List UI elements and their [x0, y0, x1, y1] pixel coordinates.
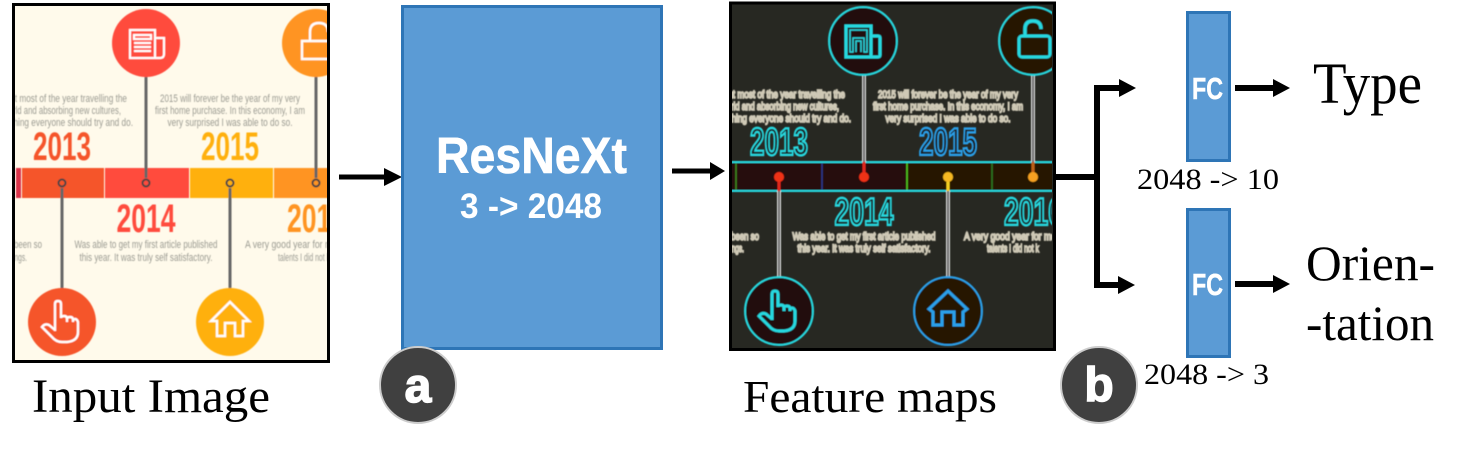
year labels: 2015: [201, 125, 259, 169]
year labels: 2014: [116, 197, 176, 241]
timeline band: [16, 168, 328, 198]
panel: FC block bottom: FC: [1192, 267, 1223, 302]
output label: orientation: Orien-: [1306, 235, 1435, 291]
panel: feature maps: [709, 3, 1067, 350]
output label: type: Type: [1313, 51, 1422, 116]
small description text: spent most of the year travelling the: [0, 93, 127, 105]
feature year labels: 2016: [1004, 191, 1063, 234]
year labels: 2013: [33, 125, 91, 169]
badge: a: a: [405, 360, 432, 413]
small description text: A very good year for me: [245, 239, 337, 251]
label: 2048 to 3: 2048 -> 3: [1144, 358, 1269, 391]
feature description text: [709, 89, 1056, 255]
small description text: talents I did not k: [278, 252, 330, 264]
caption: feature maps: Feature maps: [743, 371, 997, 422]
panel: FC block top: [1188, 12, 1230, 160]
feature description text: first home purchase. In this economy, I am: [873, 101, 1023, 113]
badge: b: b: [1084, 359, 1114, 412]
small description text: been so: [14, 239, 42, 251]
icon: newspaper: [112, 9, 180, 77]
feature band: [726, 162, 1062, 191]
feature description text: been so: [731, 231, 759, 243]
feature year labels: 2014: [834, 191, 894, 234]
small description text: 2015 will forever be the year of my very: [160, 93, 300, 105]
feature description text: 2015 will forever be the year of my very: [878, 89, 1018, 101]
small description text: [0, 93, 337, 264]
panel: ResNeXt block: 3 -> 2048: [460, 187, 602, 226]
icon: house edges: [914, 277, 982, 345]
icon: open lock: [281, 8, 327, 78]
feature description text: something everyone should try and do.: [709, 113, 851, 125]
small description text: world and absorbing new cultures,: [2, 105, 121, 117]
feature description text: spent most of the year travelling the: [715, 89, 845, 101]
feature description text: Was able to get my first article published: [792, 231, 936, 243]
arrow: FC to orientation: [1235, 275, 1290, 293]
small description text: ings.: [13, 252, 27, 264]
small description text: Was able to get my first article published: [74, 239, 218, 251]
output label: orientation: -tation: [1306, 295, 1434, 351]
year labels: [33, 131, 327, 234]
feature description text: very surprised I was able to do so.: [886, 113, 1010, 125]
panel: ResNeXt block: [402, 6, 662, 348]
icon: pointing hand edges: [745, 277, 813, 345]
feature description text: talents I did not k: [987, 243, 1039, 255]
small description text: very surprised I was able to do so.: [168, 117, 292, 129]
feature description text: ings.: [730, 243, 744, 255]
arrow: FC to type: [1235, 79, 1290, 97]
feature year labels: 2015: [919, 121, 977, 164]
feature connector lines and dots: [774, 75, 1038, 278]
output label: orientation: [1306, 235, 1435, 351]
arrow: ResNeXt to feature maps: [672, 162, 725, 180]
badge: b: [1061, 347, 1137, 423]
feature year labels: 2013: [750, 121, 808, 164]
panel: ResNeXt block: ResNeXt: [436, 127, 627, 184]
arrow: branching connector: [1056, 79, 1136, 294]
panel: FC block bottom: [1188, 210, 1230, 356]
arrow: input to ResNeXt: [339, 168, 402, 186]
feature description text: this year. It was truly self satisfactory.: [798, 243, 930, 255]
connector lines and dots: [58, 70, 320, 292]
caption: input image: Input Image: [32, 370, 270, 423]
icon: open lock edges: [997, 5, 1052, 77]
label: 2048 to 10: 2048 -> 10: [1137, 163, 1279, 196]
panel: input image: [0, 4, 350, 362]
small description text: this year. It was truly self satisfactory.: [80, 252, 212, 264]
icon: house: [196, 288, 264, 356]
small description text: first home purchase. In this economy, I am: [155, 105, 305, 117]
feature description text: world and absorbing new cultures,: [720, 101, 839, 113]
icon: pointing hand: [28, 288, 96, 356]
year labels: 2016: [287, 197, 346, 241]
feature description text: A very good year for me: [964, 231, 1056, 243]
panel: FC block top: FC: [1192, 71, 1223, 106]
feature year labels: [749, 126, 1052, 228]
icon: newspaper edges: [829, 7, 897, 75]
badge: a: [380, 347, 456, 423]
